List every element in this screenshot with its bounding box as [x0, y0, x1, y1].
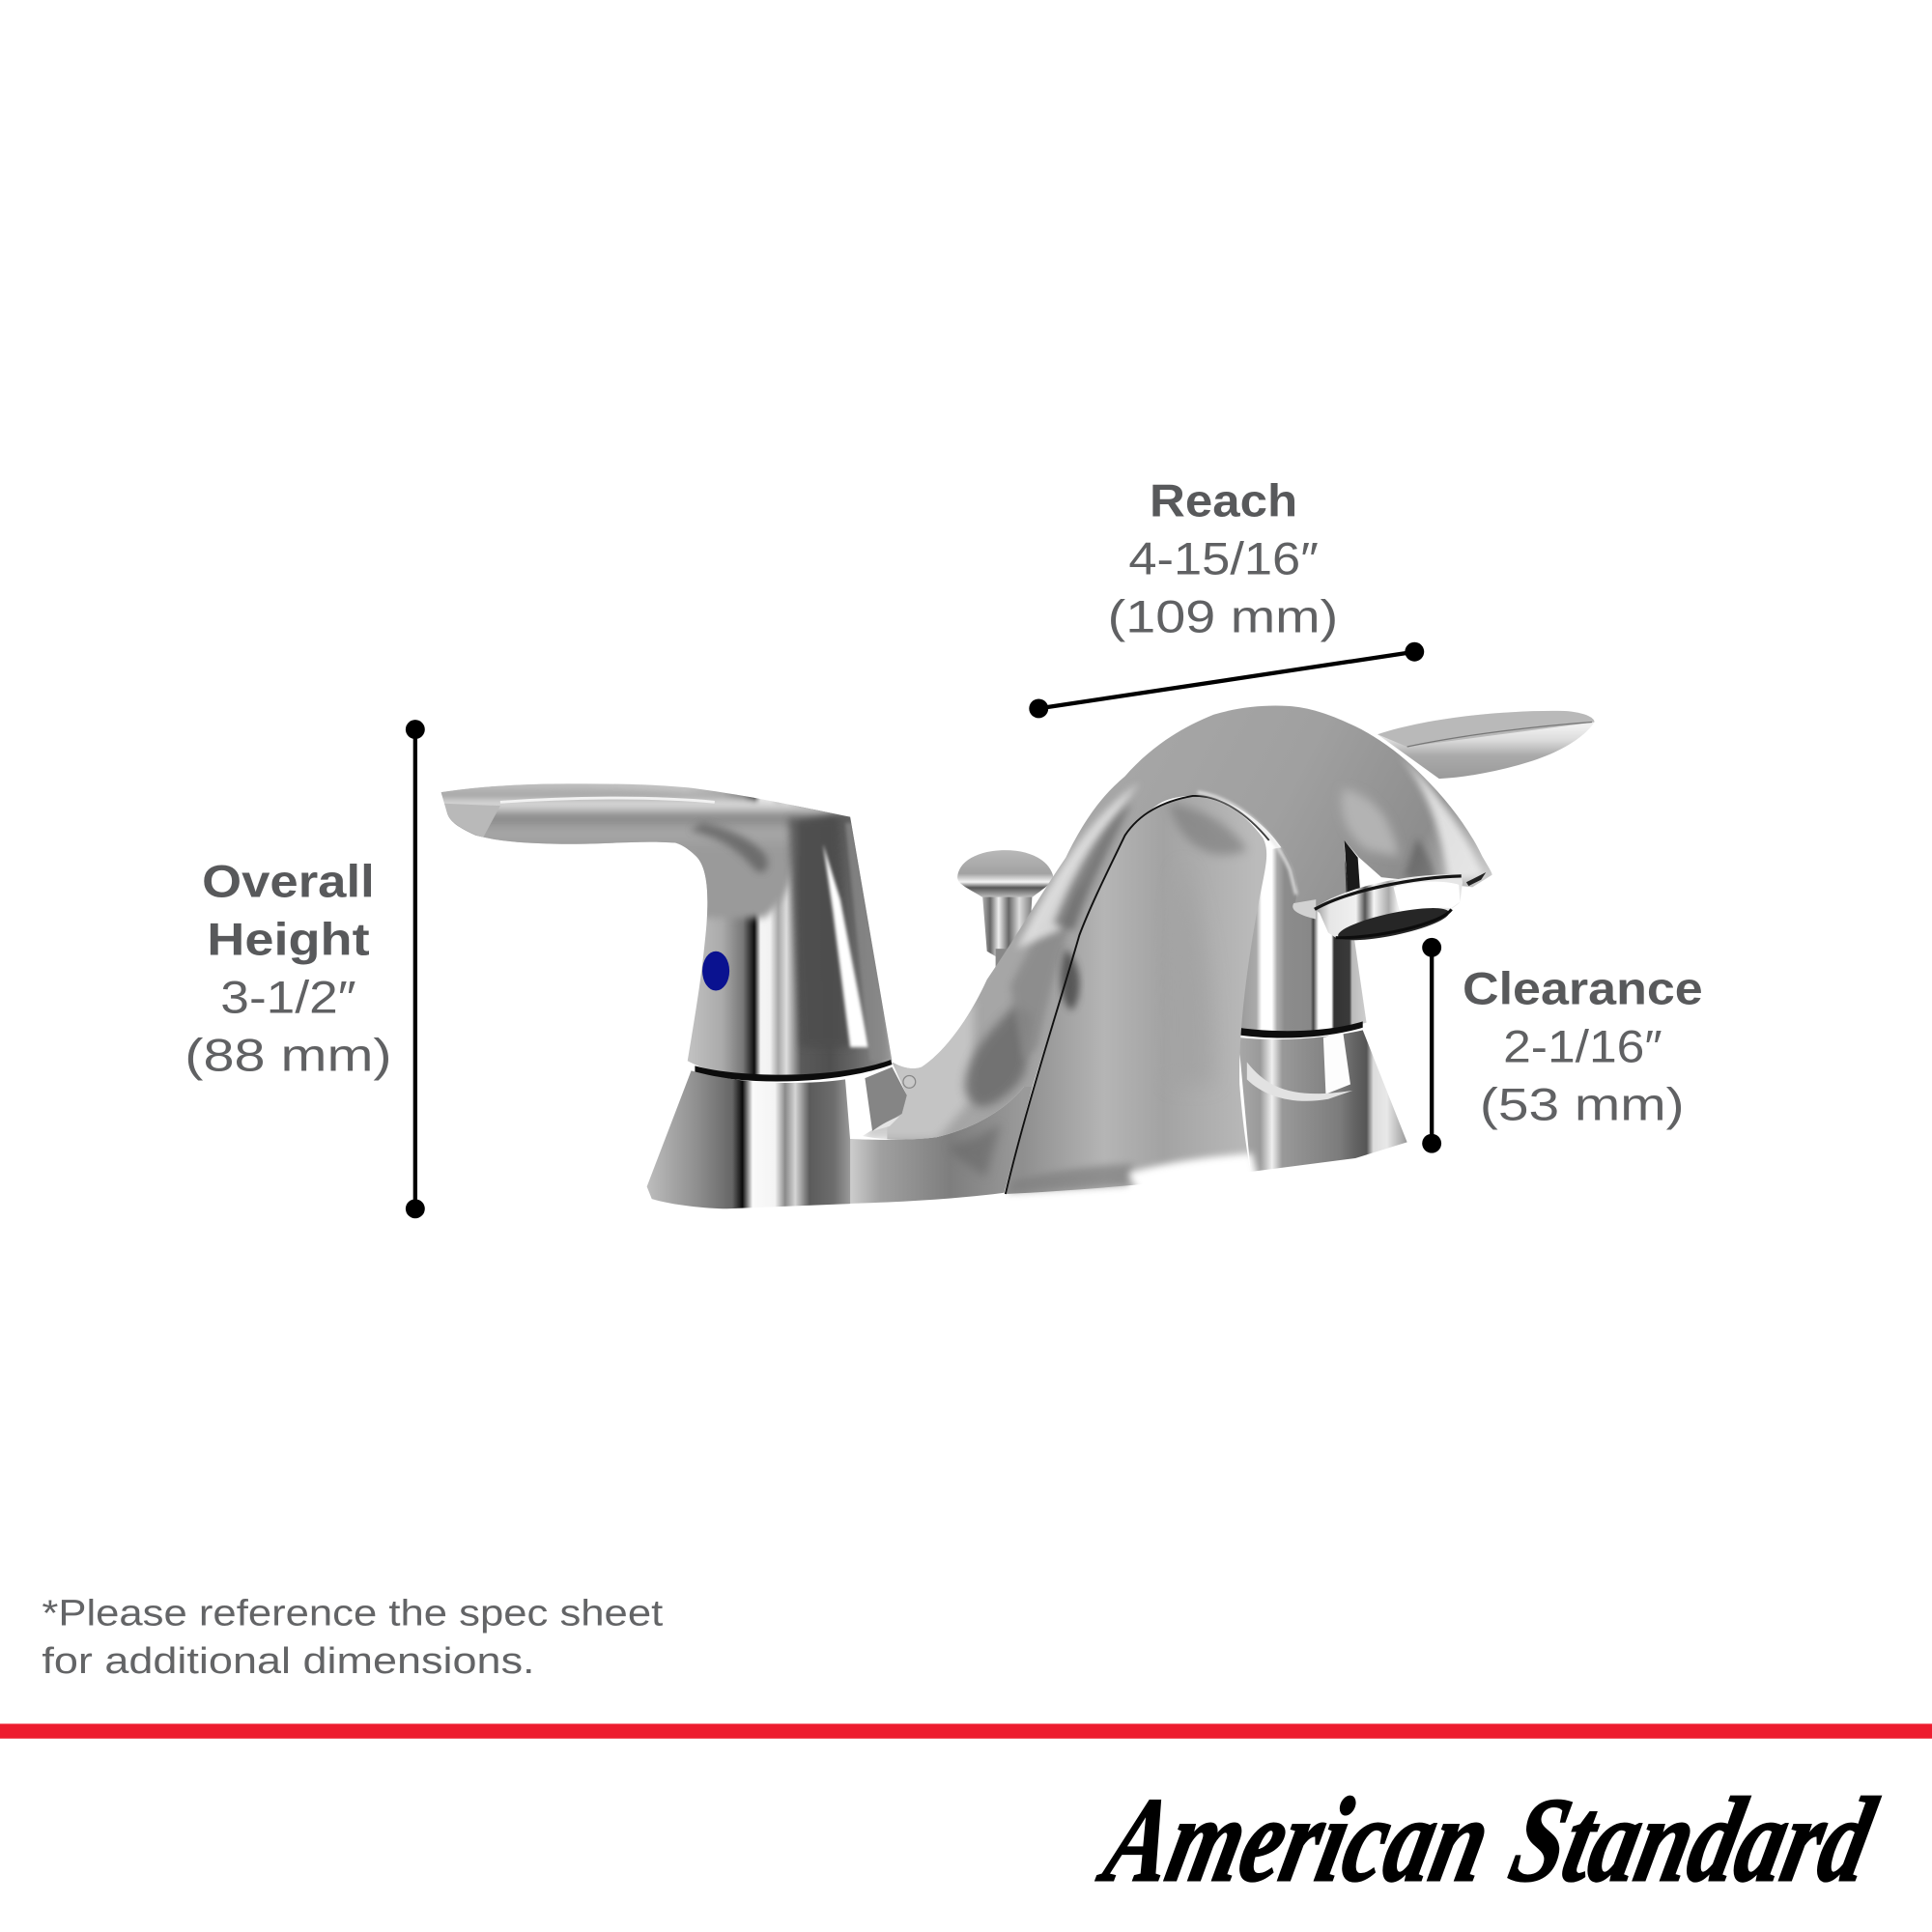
right flank [845, 823, 892, 1061]
footnote [42, 1592, 664, 1682]
rear handle ring [1238, 1021, 1363, 1038]
rear stem upper [1238, 838, 1367, 1033]
aerator ring line [1315, 876, 1462, 909]
label: overall height: 3-1/2″ [220, 972, 356, 1023]
spout rim sliver [1466, 872, 1486, 886]
label: reach [1108, 475, 1338, 642]
aerator screen [1336, 901, 1451, 947]
footnote: for additional dimensions. [42, 1640, 535, 1682]
left handle [431, 774, 899, 1084]
center plate [1006, 796, 1266, 1194]
rear strut behind spout [865, 1067, 907, 1131]
label: clearance: 2-1/16″ [1503, 1021, 1662, 1072]
arm shoulder shadow [690, 823, 767, 872]
plate soft reflections [1168, 804, 1247, 855]
logo: American Standard [1089, 1774, 1887, 1907]
arm top highlight [500, 798, 715, 802]
red divider bar [0, 1723, 1932, 1739]
spout tip highlights [1399, 754, 1485, 881]
label: clearance [1463, 964, 1703, 1130]
faucet illustration [431, 690, 1595, 1208]
spout dark oval reflection [965, 1005, 1032, 1107]
rear base scoop [1247, 1062, 1353, 1101]
pop-up knob [957, 850, 1054, 985]
plate bottom shade [1008, 1164, 1133, 1193]
label: overall height: Overall [202, 857, 375, 908]
rear handle [1378, 711, 1595, 779]
label: clearance: (53 mm) [1480, 1079, 1685, 1130]
label: reach: Reach [1150, 475, 1297, 526]
dimension: overall height [406, 720, 425, 1218]
strut highlight [872, 1117, 899, 1131]
label: reach: (109 mm) [1108, 591, 1338, 642]
blue cold indicator [702, 952, 729, 991]
right sliver highlight [823, 844, 868, 1047]
plate black outline [1006, 796, 1269, 1194]
footnote: *Please reference the spec sheet [42, 1592, 664, 1634]
stem dark band top [788, 818, 850, 1047]
label: overall height [185, 857, 392, 1081]
deck lower shading [949, 1123, 1001, 1177]
label: overall height: Height [207, 915, 370, 966]
label: clearance: Clearance [1463, 964, 1703, 1015]
label: overall height: (88 mm) [185, 1030, 392, 1081]
spout lower light sweep [863, 998, 974, 1140]
arm overlay [431, 774, 863, 918]
rear gap highlight [1323, 1033, 1350, 1094]
spout body [864, 705, 1492, 1140]
label: reach: 4-15/16″ [1128, 533, 1319, 584]
arch double edge [1198, 792, 1296, 895]
aerator see-through window [1394, 882, 1460, 912]
arm tip facet [441, 804, 500, 838]
spout band next to plate [1009, 923, 1069, 1051]
white gap and stem behind spout tip [1345, 840, 1381, 894]
plate white glare [1128, 1153, 1260, 1195]
spout arch highlight [1016, 782, 1140, 949]
dimension: reach [1029, 642, 1424, 718]
logo: American Standard: American [1089, 1774, 1502, 1907]
deck [840, 1087, 1033, 1204]
aerator [1314, 872, 1486, 947]
left base [647, 1070, 850, 1208]
left handle ring [695, 1060, 892, 1082]
rear base lower [1238, 1030, 1407, 1172]
dimension: clearance [1422, 938, 1441, 1153]
